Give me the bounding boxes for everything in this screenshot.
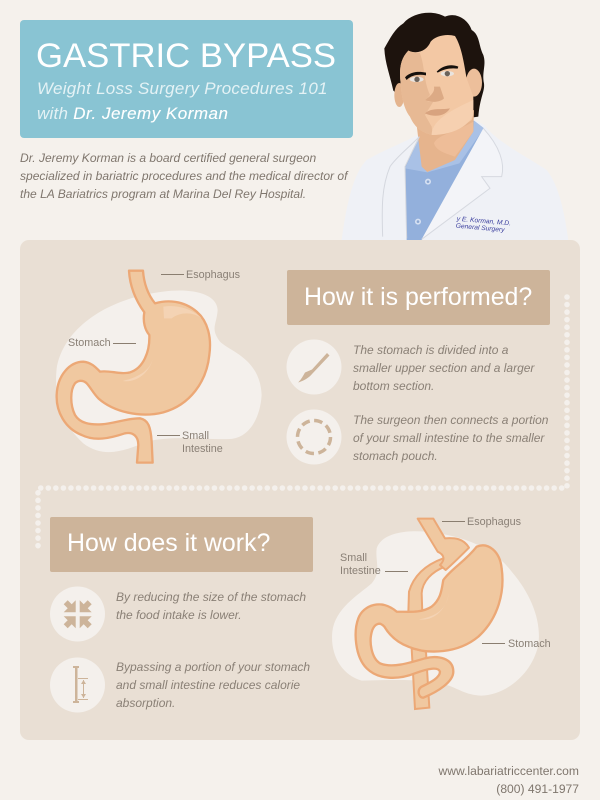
coat embroidery: General Surgery: [455, 223, 505, 234]
coat embroidery: [455, 216, 511, 234]
text: effect 2: Bypassing a portion of your stomach: [116, 660, 310, 674]
heading: how does it work: [50, 517, 313, 572]
footer contact: www.labariatriccenter.com: [438, 764, 579, 778]
label: small intestine: Intestine: [182, 443, 223, 455]
text: step 1: bottom section.: [353, 379, 434, 393]
dotted connector: [38, 297, 567, 548]
label: stomach: [482, 638, 551, 650]
descending limb: [412, 648, 429, 709]
heading: how it is performed: [287, 270, 550, 325]
subtitle author: with Dr. Jeremy Korman: [37, 104, 228, 123]
text: step 2: stomach pouch.: [353, 449, 438, 463]
label: stomach: [68, 337, 136, 349]
label: stomach: Stomach: [508, 638, 551, 650]
subtitle: Weight Loss Surgery Procedures 101: [37, 79, 328, 98]
label: small intestine: Small: [340, 552, 367, 564]
diagram: bypass stomach: [332, 519, 539, 709]
label: small intestine: Small: [182, 430, 209, 442]
icon: compress arrows: [50, 586, 105, 642]
illustration: doctor portrait: [342, 13, 568, 240]
intro text: the LA Bariatrics program at Marina Del Rey Hospital.: [20, 187, 306, 201]
label: stomach: Stomach: [68, 337, 111, 349]
roux limb: [408, 558, 445, 613]
label: small intestine: [157, 430, 223, 455]
text: step 1: [353, 343, 535, 393]
title: GASTRIC BYPASS: [36, 37, 336, 75]
text: step 2: of your small intestine to the smaller: [353, 431, 545, 445]
coat embroidery: y E. Korman, M.D.: [455, 216, 511, 227]
icon: dashed circle: [286, 410, 342, 464]
label: esophagus: [161, 269, 241, 281]
label: esophagus: Esophagus: [467, 516, 522, 528]
text: effect 1: the food intake is lower.: [116, 608, 242, 622]
label: esophagus: [442, 516, 522, 528]
label: small intestine: [340, 552, 408, 577]
label: small intestine: Intestine: [340, 565, 381, 577]
text: effect 2: [116, 660, 310, 710]
intro text: Dr. Jeremy Korman is a board certified general surgeon: [20, 151, 316, 165]
main panel: [20, 240, 580, 740]
blob: [332, 531, 539, 696]
text: effect 2: and small intestine reduces calorie: [116, 678, 300, 692]
footer contact: (800) 491-1977: [496, 782, 579, 796]
text: step 1: smaller upper section and a larger: [353, 361, 535, 375]
pouch: [418, 519, 469, 570]
blob: [56, 291, 262, 452]
lower stomach and intestine: [356, 545, 502, 698]
icon: scalpel: [286, 340, 342, 394]
heading: how it is performed: How it is performed?: [304, 283, 532, 311]
text: effect 1: [116, 590, 306, 622]
intro text: [20, 151, 349, 201]
text: step 2: [353, 413, 549, 463]
title banner: [20, 20, 353, 138]
diagram: normal stomach: [56, 271, 262, 463]
heading: how does it work: How does it work?: [67, 529, 270, 557]
label: esophagus: Esophagus: [186, 269, 241, 281]
stomach shape: [57, 271, 210, 463]
text: effect 1: By reducing the size of the stomach: [116, 590, 306, 604]
text: step 1: The stomach is divided into a: [353, 343, 509, 357]
intro text: specialized in bariatric procedures and the medical director of: [20, 169, 349, 183]
footer contact: [438, 764, 579, 796]
text: step 2: The surgeon then connects a portion: [353, 413, 549, 427]
text: effect 2: absorption.: [116, 696, 175, 710]
icon: measure: [50, 658, 105, 712]
